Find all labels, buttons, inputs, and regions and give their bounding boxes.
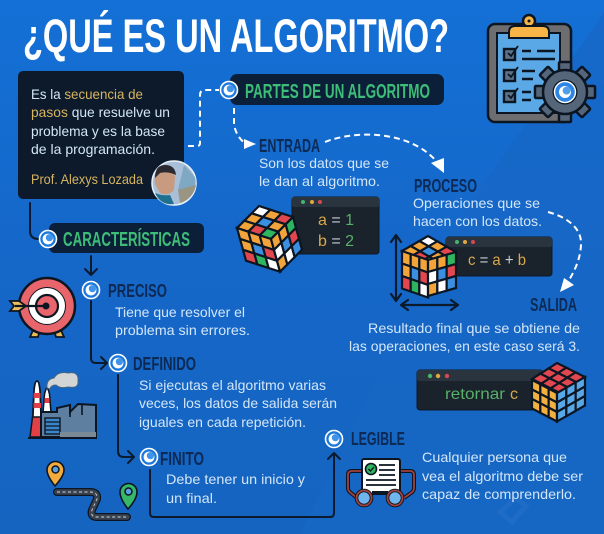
block: salida: Resultado final que se obtiene de	[368, 321, 580, 336]
block: entrada	[259, 136, 389, 189]
block: salida: SALIDA	[530, 295, 577, 315]
item: finito	[140, 448, 305, 506]
item: definido: Si ejecutas el algoritmo varias	[139, 378, 326, 393]
item: legible	[326, 429, 583, 502]
item: preciso	[82, 281, 250, 338]
block: entrada: le dan al algoritmo.	[259, 174, 380, 189]
icon: target	[10, 278, 75, 337]
item: preciso: problema sin errores.	[115, 323, 250, 338]
item: finito: Debe tener un inicio y	[166, 472, 305, 487]
author: Prof. Alexys Lozada	[31, 172, 143, 187]
item: definido	[110, 354, 337, 430]
heading: caracteristicas: CARACTERÍSTICAS	[63, 228, 190, 251]
definition text: problema y es la base	[31, 124, 165, 139]
connector: definition to parts	[188, 90, 219, 146]
arrow: to preciso	[85, 256, 97, 275]
arrow: entrada to proceso	[325, 135, 444, 173]
item: legible: vea el algoritmo debe ser	[422, 469, 583, 484]
definition text: Es la secuencia de	[31, 87, 143, 102]
definition text: de la programación.	[31, 142, 155, 157]
block: entrada: Son los datos que se	[259, 156, 389, 171]
code window: retornar c	[417, 370, 543, 410]
block: proceso	[413, 176, 542, 229]
block: proceso: hacen con los datos.	[413, 214, 542, 229]
item: definido: DEFINIDO	[133, 354, 196, 374]
block: entrada: ENTRADA	[259, 136, 320, 156]
item: preciso: Tiene que resolver el	[115, 305, 245, 320]
definition text: pasos que resuelve un	[31, 105, 170, 120]
arrow: definido to finito	[118, 375, 134, 463]
icon: rubik cube with dimension arrows	[391, 235, 458, 310]
code window: retornar c: retornar	[445, 386, 506, 403]
item: legible: LEGIBLE	[351, 429, 405, 449]
block: salida	[349, 295, 580, 354]
item: legible: Cualquier persona que	[422, 450, 567, 465]
icon: clipboard with gear	[488, 15, 595, 122]
arrow: proceso to salida	[548, 212, 581, 292]
block: salida: las operaciones, en este caso será 3.	[349, 339, 580, 354]
block: proceso: Operaciones que se	[413, 196, 540, 211]
arrow: finito to legible	[150, 453, 340, 517]
icon: road with pins	[47, 462, 137, 517]
icon: rubik cube tilted	[237, 206, 302, 272]
code window: retornar c: c	[510, 386, 518, 403]
item: legible: capaz de comprenderlo.	[422, 487, 576, 502]
heading: caracteristicas	[30, 203, 204, 253]
icon: document and glasses	[348, 459, 414, 506]
item: definido: veces, los datos de salida serán	[139, 396, 337, 411]
item: preciso: PRECISO	[108, 281, 167, 301]
item: finito: FINITO	[160, 449, 204, 469]
code window: a b: a = 1	[318, 212, 354, 229]
heading: partes de un algoritmo	[220, 74, 444, 105]
definition text	[31, 87, 170, 157]
code window: a b: b = 2	[318, 233, 354, 250]
code window: c = a + b	[446, 237, 552, 276]
item: definido: iguales en cada repetición.	[139, 415, 306, 430]
code window: c = a + b: c = a + b	[468, 252, 526, 269]
avatar	[152, 161, 196, 205]
code window: a b	[292, 197, 379, 254]
icon: factory	[28, 373, 97, 438]
arrow: preciso to definido	[91, 301, 107, 369]
block: proceso: PROCESO	[414, 176, 477, 196]
arrow: parts to entrada	[234, 108, 256, 149]
panel: definition	[18, 71, 196, 205]
icon: rubik cube solid	[532, 363, 585, 422]
heading: partes de un algoritmo: PARTES DE UN ALGORITMO	[245, 81, 430, 103]
item: finito: un final.	[166, 491, 217, 506]
